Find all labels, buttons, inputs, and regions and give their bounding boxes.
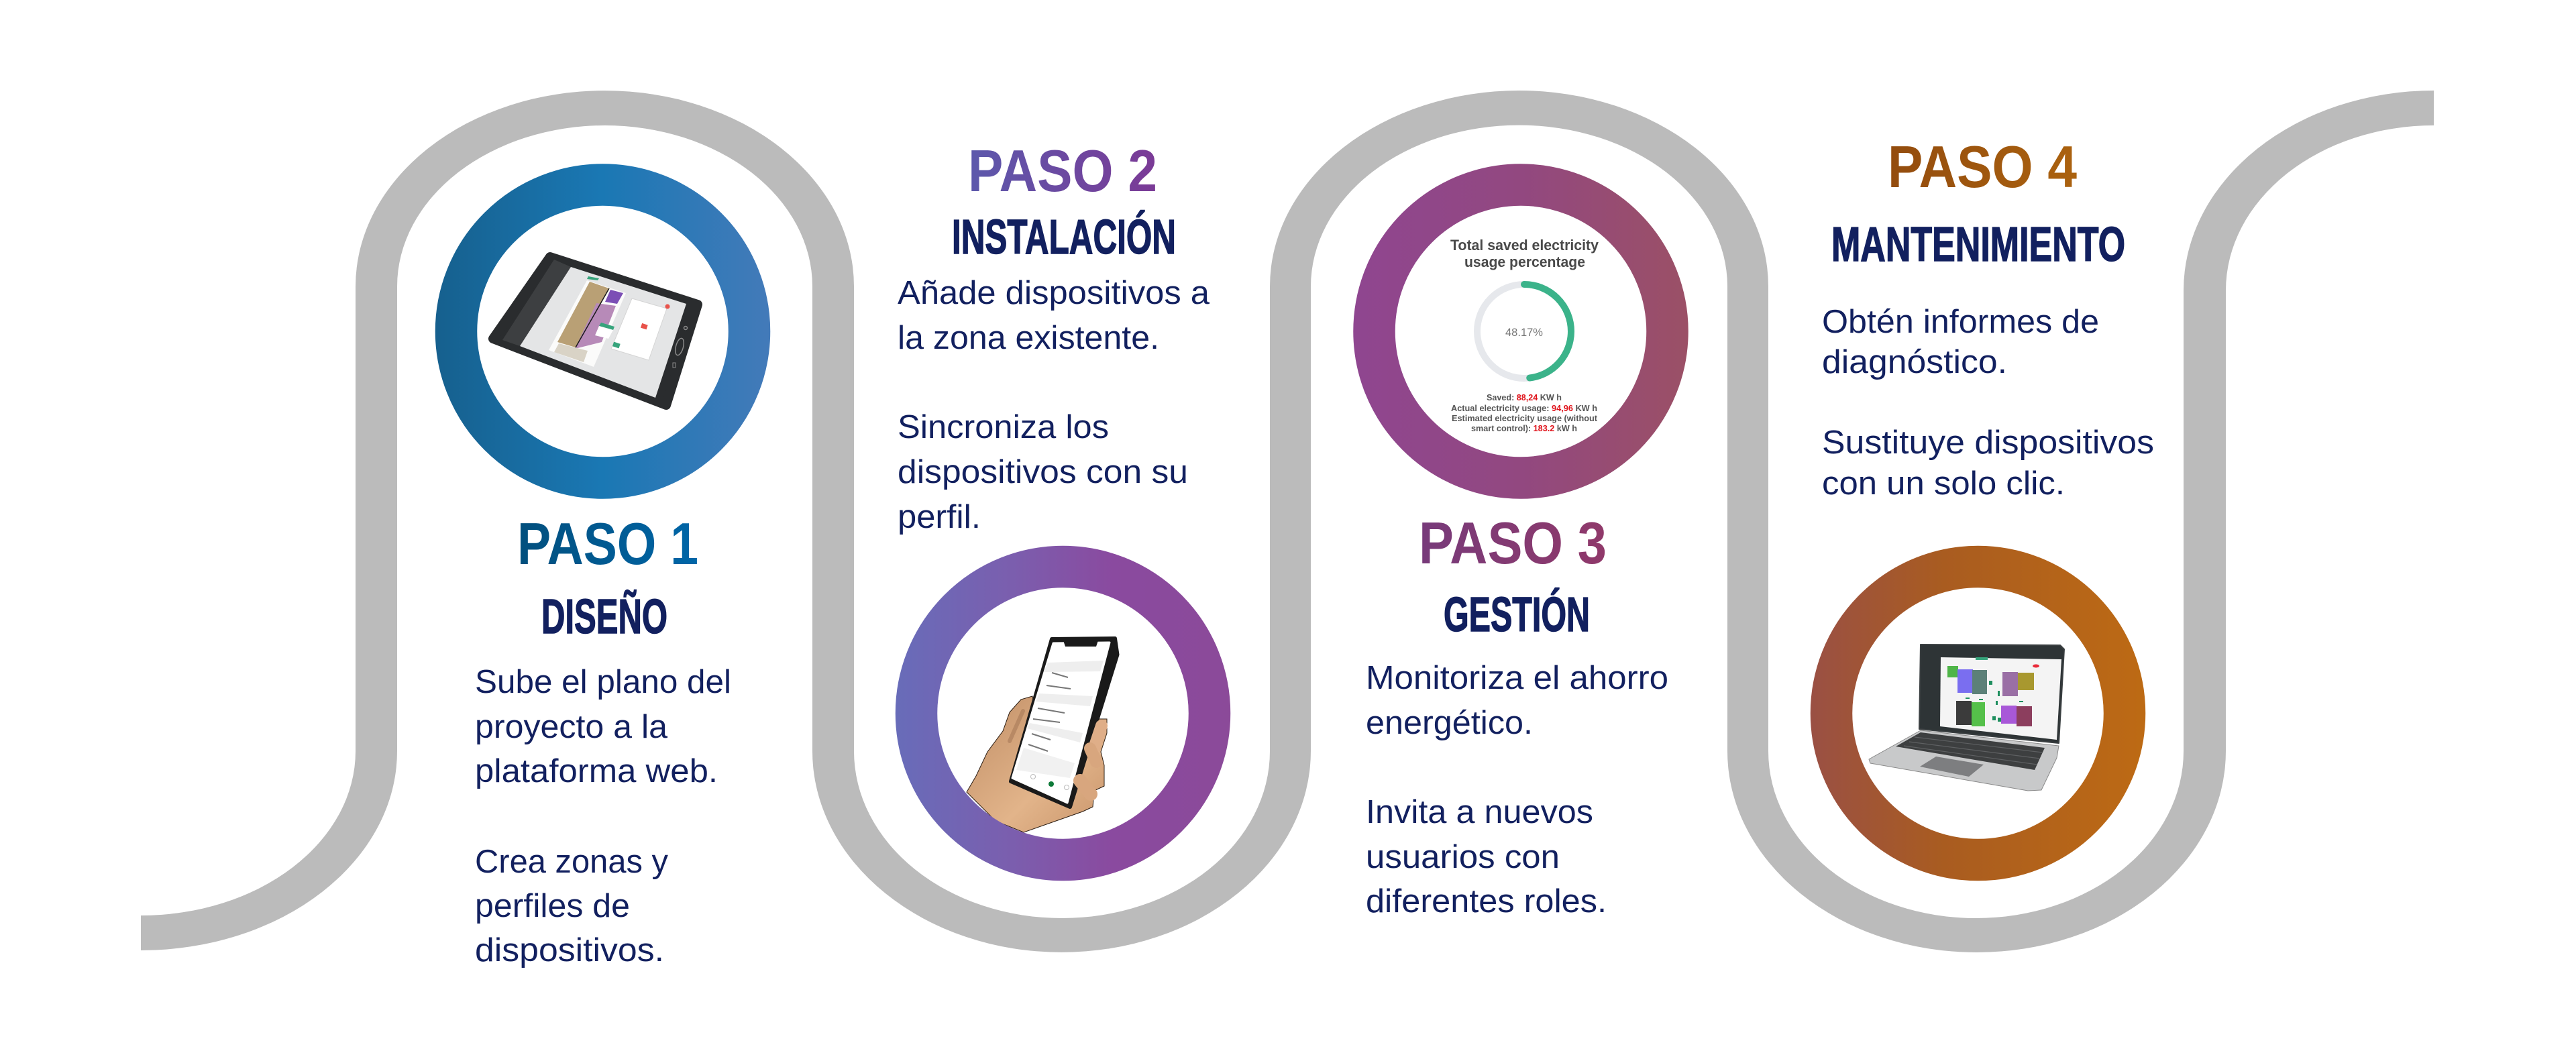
text block: paso 4 description: Sustituye dispositivos — [1822, 425, 2154, 461]
ring: paso 4 — [1831, 567, 2125, 860]
panel: paso 2 instalación — [898, 137, 1210, 860]
panel: paso 3 gestión — [1366, 185, 1668, 920]
text block: paso 3 description: Invita a nuevos — [1366, 794, 1593, 830]
heading: paso 3: PASO 3 — [1419, 510, 1607, 576]
chart stats: Actual electricity usage: 94,96 KW h — [1451, 403, 1597, 413]
text block: paso 1 description: Crea zonas y — [475, 844, 668, 880]
chart: saved electricity donut — [1450, 237, 1599, 433]
text block: paso 3 description: Monitoriza el ahorro — [1366, 660, 1668, 696]
text block: paso 1 description: perfiles de — [475, 888, 630, 924]
heading: paso 1: PASO 1 — [517, 510, 698, 577]
icon: laptop with dashboard — [1869, 645, 2064, 791]
text block: paso 1 description: dispositivos. — [475, 932, 664, 968]
text block: paso 4 description: con un solo clic. — [1822, 465, 2065, 502]
subheading: instalación: INSTALACIÓN — [952, 210, 1176, 264]
chart title — [1450, 237, 1599, 270]
text block: paso 2 description: la zona existente. — [898, 320, 1159, 356]
text block: paso 1 description: proyecto a la — [475, 709, 668, 745]
chart stats: Saved: 88,24 KW h — [1487, 392, 1562, 402]
ring: paso 3 — [1374, 185, 1668, 478]
heading: paso 2: PASO 2 — [968, 137, 1157, 204]
text block: paso 3 description: diferentes roles. — [1366, 883, 1607, 920]
ring: paso 1 — [456, 185, 749, 478]
chart stats — [1451, 392, 1598, 433]
chart title: usage percentage — [1464, 254, 1585, 270]
text block: paso 2 description: dispositivos con su — [898, 454, 1188, 490]
subheading: diseño: DISEÑO — [541, 590, 667, 644]
chart stats: Estimated electricity usage (without — [1452, 413, 1598, 423]
panel: paso 1 diseño — [456, 185, 749, 968]
grey winding road — [141, 91, 2434, 952]
panel: paso 4 mantenimiento — [1822, 133, 2154, 860]
text block: paso 1 description: Sube el plano del — [475, 664, 731, 700]
text block: paso 2 description: perfil. — [898, 499, 981, 535]
donut gauge — [1477, 284, 1571, 378]
text block: paso 1 description — [475, 664, 731, 968]
heading: paso 4: PASO 4 — [1888, 133, 2077, 200]
chart stats: smart control): 183.2 kW h — [1471, 423, 1577, 433]
text block: paso 4 description — [1822, 304, 2154, 502]
icon: tablet with floor plan — [493, 257, 698, 405]
text block: paso 3 description — [1366, 660, 1668, 920]
text block: paso 3 description: usuarios con — [1366, 839, 1560, 875]
subheading: gestión: GESTIÓN — [1444, 588, 1590, 642]
ring: paso 2 — [916, 567, 1210, 860]
text block: paso 2 description — [898, 275, 1210, 535]
text block: paso 2 description: Añade dispositivos a — [898, 275, 1210, 311]
text block: paso 1 description: plataforma web. — [475, 753, 718, 789]
text block: paso 4 description: Obtén informes de — [1822, 304, 2099, 340]
text block: paso 3 description: energético. — [1366, 705, 1533, 741]
icon: hand holding phone — [967, 638, 1118, 832]
donut value: 48.17% — [1505, 326, 1543, 339]
text block: paso 4 description: diagnóstico. — [1822, 344, 2007, 380]
text block: paso 2 description: Sincroniza los — [898, 409, 1109, 445]
subheading: mantenimiento: MANTENIMIENTO — [1831, 218, 2125, 272]
chart title: Total saved electricity — [1450, 237, 1599, 254]
